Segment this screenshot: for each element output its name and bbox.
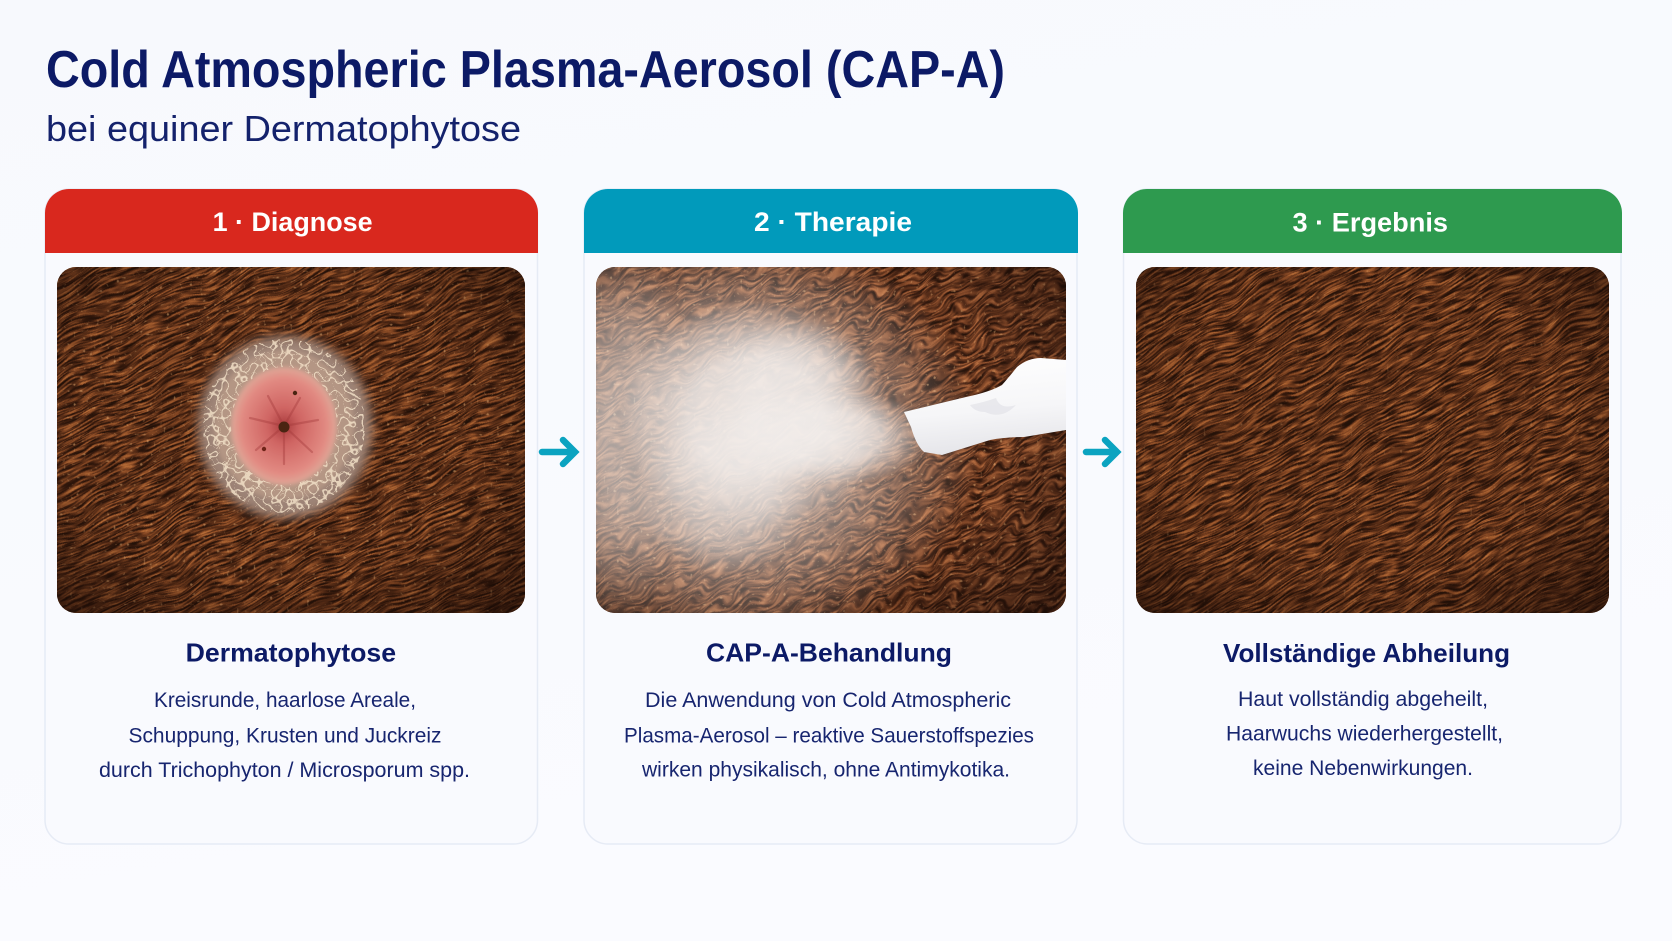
arrow: Therapie to Ergebnis (1086, 440, 1117, 464)
body text: keine Nebenwirkungen. (1253, 757, 1473, 780)
header: 3 Ergebnis (1123, 189, 1622, 253)
subtitle: bei equiner Dermatophytose (46, 108, 521, 149)
heading: Vollständige Abheilung: Vollständige Abheilung (1223, 638, 1510, 668)
lesion (198, 336, 372, 518)
body text: Schuppung, Krusten und Juckreiz (128, 724, 442, 748)
body text: Haarwuchs wiederhergestellt, (1226, 722, 1503, 746)
body text: Plasma-Aerosol – reaktive Sauerstoffspezies (624, 724, 1034, 748)
header: 3 Ergebnis: 3 · Ergebnis (1292, 208, 1448, 238)
card background (45, 189, 538, 844)
body text (1226, 688, 1503, 780)
header: 1 Diagnose: 1 · Diagnose (213, 207, 373, 237)
card background (584, 189, 1077, 844)
fog (596, 267, 970, 613)
heading: Dermatophytose: Dermatophytose (186, 638, 396, 668)
body text (624, 689, 1034, 782)
header: 1 Diagnose (45, 189, 538, 253)
panel: Ergebnis (1122, 188, 1622, 845)
body text (99, 689, 470, 782)
heading: CAP-A-Behandlung: CAP-A-Behandlung (706, 638, 952, 668)
panel: Therapie (583, 188, 1078, 845)
title: Cold Atmospheric Plasma-Aerosol (CAP-A) (46, 41, 1005, 99)
body text: Die Anwendung von Cold Atmospheric (645, 689, 1011, 712)
panel: Diagnose (44, 188, 538, 845)
header: 2 Therapie (584, 189, 1078, 253)
card background (1124, 189, 1621, 844)
arrow: Diagnose to Therapie (542, 440, 575, 464)
header: 2 Therapie: 2 · Therapie (754, 207, 912, 237)
body text: wirken physikalisch, ohne Antimykotika. (641, 758, 1010, 782)
body text: durch Trichophyton / Microsporum spp. (99, 759, 470, 782)
image: fur with circular lesion (57, 267, 525, 613)
image: healed fur (1136, 267, 1609, 613)
image: aerosol spray on fur (596, 267, 1066, 613)
body text: Haut vollständig abgeheilt, (1238, 688, 1488, 711)
body text: Kreisrunde, haarlose Areale, (154, 689, 416, 712)
spray nozzle (904, 358, 1066, 455)
